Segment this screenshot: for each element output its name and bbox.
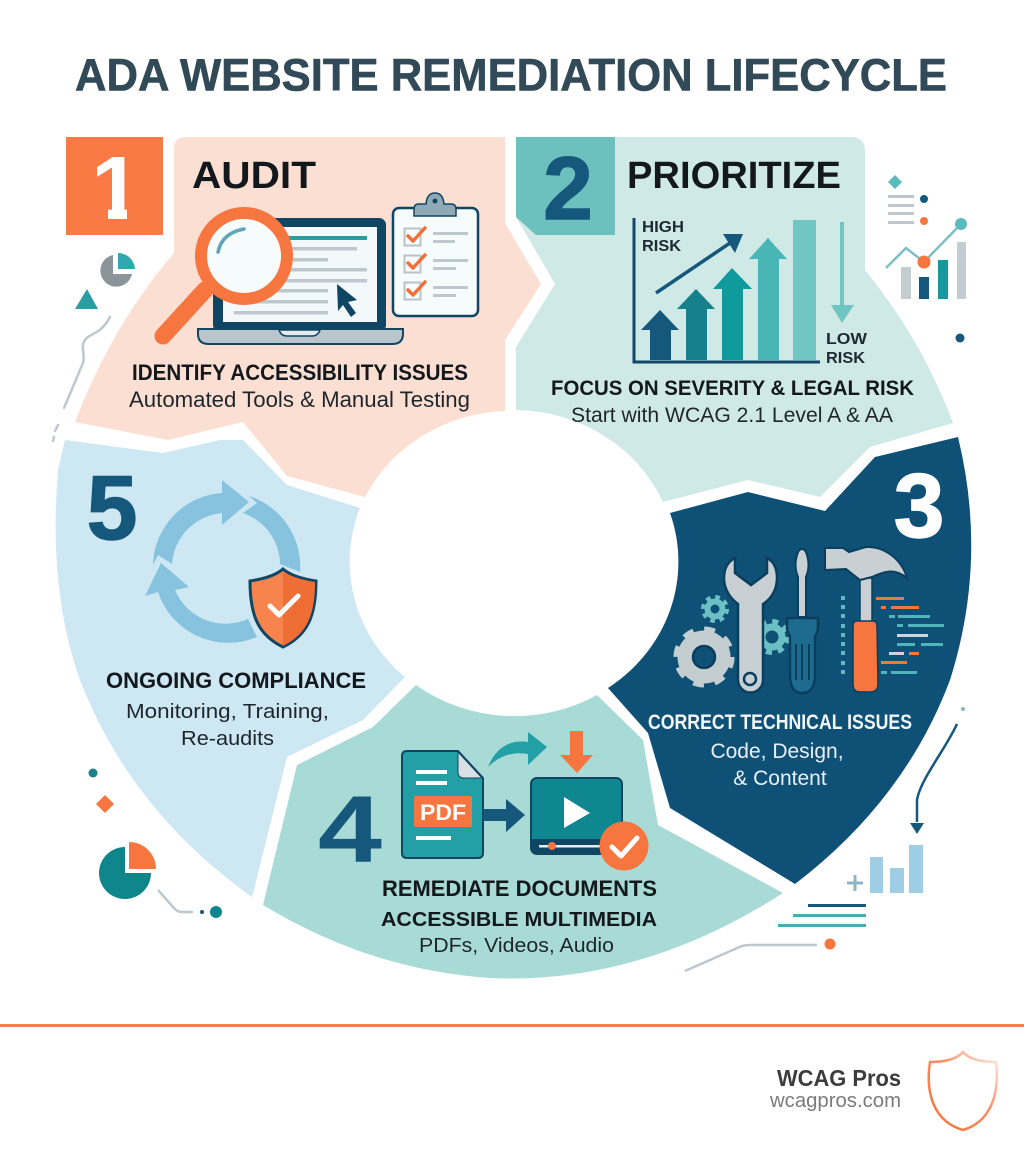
heading: audit: AUDIT — [192, 155, 316, 197]
icon: pdf document: PDF — [420, 800, 466, 825]
decoration: top right mini chart — [886, 175, 967, 342]
footer: brand text: wcagpros.com — [769, 1090, 901, 1112]
arrow: orange down — [560, 731, 593, 773]
icon: clipboard — [393, 193, 478, 316]
label: low risk: RISK — [826, 350, 865, 367]
panel background — [56, 440, 405, 897]
title: ADA WEBSITE REMEDIATION LIFECYCLE — [75, 50, 947, 100]
panel: step 1 audit — [66, 137, 541, 497]
text: code design content — [710, 740, 844, 790]
text: accessible multimedia: ACCESSIBLE MULTIMEDIA — [381, 908, 657, 931]
text: start with wcag: Start with WCAG 2.1 Level A & AA — [571, 404, 893, 427]
heading: prioritize: PRIORITIZE — [627, 155, 841, 197]
icon: cycle arrows — [145, 480, 300, 643]
decoration: bottom left pie and shapes — [88, 768, 222, 918]
panel background — [608, 437, 971, 884]
panel: step 2 prioritize — [516, 137, 953, 502]
arrow: curved teal — [488, 732, 547, 767]
footer: brand text: WCAG Pros — [777, 1065, 901, 1091]
number badge 2: 2 — [543, 138, 593, 238]
text: automated tools and manual testing: Automated Tools & Manual Testing — [129, 387, 470, 412]
arrow: document to video — [483, 799, 525, 832]
number 5: 5 — [87, 458, 137, 559]
panel background — [75, 137, 541, 497]
text: code design content: & Content — [733, 767, 827, 790]
panel: step 5 ongoing compliance — [56, 440, 405, 897]
footer rule — [0, 1024, 1024, 1027]
arrow: rising risk — [656, 234, 743, 293]
decoration: top left pie and shapes — [53, 253, 135, 441]
text: remediate documents: REMEDIATE DOCUMENTS — [382, 876, 657, 901]
text: pdfs videos audio: PDFs, Videos, Audio — [419, 934, 614, 957]
icon: wrench — [724, 558, 777, 692]
text: code design content: Code, Design, — [710, 740, 844, 763]
icon: hammer — [825, 547, 907, 692]
number 4: 4 — [318, 777, 382, 883]
text: monitoring training re-audits — [126, 700, 329, 750]
text: identify accessibility issues: IDENTIFY ACCESSIBILITY ISSUES — [132, 360, 468, 385]
label: low risk — [826, 331, 868, 367]
footer: shield logo — [929, 1052, 997, 1130]
icon: code lines — [841, 596, 944, 674]
icon: shield check — [250, 569, 316, 647]
number badge 2 — [516, 137, 615, 238]
number badge 1 — [66, 137, 163, 239]
text: ongoing compliance: ONGOING COMPLIANCE — [106, 668, 366, 693]
icon: screwdriver — [787, 549, 818, 693]
panel background — [263, 685, 783, 978]
icon: small teal gear — [703, 597, 727, 621]
panel: step 4 remediate documents — [263, 685, 783, 978]
arrow: falling risk — [831, 222, 854, 323]
number 3: 3 — [894, 456, 944, 557]
label: high risk: RISK — [642, 238, 681, 255]
icon: check badge — [600, 822, 648, 870]
icon: video player — [531, 778, 622, 854]
text: monitoring training re-audits: Re-audits — [181, 727, 274, 750]
chart: risk arrows — [634, 218, 868, 367]
label: low risk: LOW — [826, 331, 868, 348]
decoration: bottom right chart and lines — [685, 707, 965, 971]
footer: brand text — [769, 1065, 901, 1112]
panel background — [516, 137, 953, 502]
icon: large gray gear — [677, 630, 731, 684]
icon: medium teal gear — [756, 622, 788, 652]
label: high risk — [642, 219, 684, 255]
text: correct technical issues: CORRECT TECHNICAL ISSUES — [648, 710, 912, 734]
text: focus on severity and legal risk: FOCUS ON SEVERITY & LEGAL RISK — [551, 376, 914, 400]
number badge 1: 1 — [91, 139, 141, 239]
label: high risk: HIGH — [642, 219, 684, 236]
icon: laptop — [198, 218, 403, 344]
text: monitoring training re-audits: Monitoring, Training, — [126, 700, 329, 723]
icon: cursor — [337, 284, 357, 317]
icon: pdf document — [402, 751, 483, 858]
panel: step 3 correct technical issues — [608, 437, 971, 884]
icon: magnifying glass — [163, 213, 287, 336]
